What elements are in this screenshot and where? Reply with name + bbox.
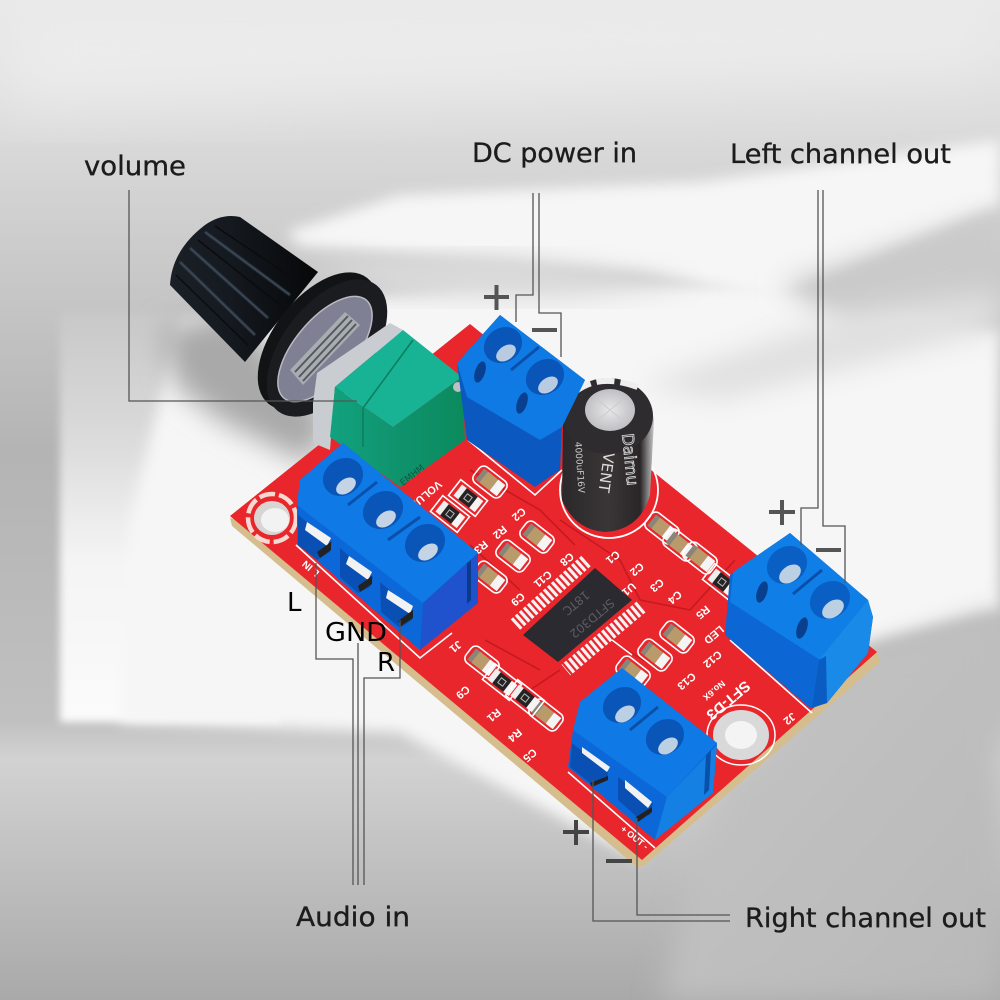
amplifier chip: 18TC <box>560 588 592 618</box>
minus sign: right channel <box>606 859 632 863</box>
label: DC power in: DC power in <box>472 138 637 169</box>
threaded shaft <box>290 312 360 385</box>
board labels: L IN <box>301 558 322 578</box>
leader: volume <box>129 190 357 401</box>
board labels: C2 <box>509 505 528 523</box>
minus sign: left channel <box>816 548 841 552</box>
label: GND: GND <box>325 618 387 648</box>
plus sign: right channel <box>563 820 589 845</box>
silkscreen outlines <box>296 440 812 848</box>
leader: DC power plus <box>516 193 533 322</box>
potentiometer: EMHM <box>399 463 427 488</box>
washer <box>261 281 389 417</box>
board labels: LED <box>701 623 726 646</box>
left mounting hole <box>248 494 296 542</box>
copper traces <box>470 470 735 690</box>
minus sign: DC <box>532 328 557 332</box>
board labels: C9 <box>508 590 527 608</box>
smd capacitors <box>462 464 720 733</box>
leader: right channel plus <box>593 780 730 921</box>
label: Left channel out: Left channel out <box>730 139 951 170</box>
board labels <box>301 478 798 851</box>
terminal: left channel out <box>725 533 873 708</box>
leader: DC power minus <box>539 193 561 357</box>
circuit board <box>230 324 880 868</box>
leader: right channel minus <box>637 818 730 915</box>
knob skirt <box>234 251 402 431</box>
leader: audio R <box>364 620 400 885</box>
board labels: R2 <box>490 523 509 541</box>
leader: audio L <box>316 563 353 885</box>
volume knob <box>170 216 411 438</box>
board labels: J1 <box>447 638 464 655</box>
board labels: C5 <box>520 746 539 764</box>
board labels: R1 <box>484 706 503 724</box>
leader lines <box>129 190 845 921</box>
board labels: U1 <box>619 580 638 598</box>
capacitor <box>560 378 658 538</box>
board surface <box>230 324 877 860</box>
plus sign: DC <box>484 285 509 310</box>
board labels: C13 <box>675 670 698 692</box>
board edge <box>230 518 880 868</box>
board labels: C11 <box>531 568 554 589</box>
terminal: audio in <box>297 443 478 650</box>
label: Right channel out: Right channel out <box>745 903 986 934</box>
knob barrel <box>170 216 318 362</box>
green body side <box>330 377 465 487</box>
terminal: right channel out <box>568 668 717 840</box>
label: L: L <box>287 588 302 618</box>
label: R: R <box>377 648 395 678</box>
leader: audio GND <box>357 643 359 885</box>
capacitor: Daimu <box>618 432 642 486</box>
smd resistors <box>430 480 742 716</box>
potentiometer <box>313 323 465 488</box>
terminal: DC power <box>457 315 585 487</box>
capacitor: 4000uF16V <box>572 442 586 494</box>
board labels: SFT-D3 <box>703 677 753 723</box>
board labels: R5 <box>693 603 712 621</box>
board labels: C3 <box>647 576 666 594</box>
board labels: C1 <box>603 548 622 566</box>
metal bracket <box>313 323 403 450</box>
board labels: C9 <box>453 683 472 701</box>
board labels: R4 <box>505 726 524 745</box>
capacitor: VENT <box>594 451 618 495</box>
board labels: J2 <box>781 710 798 727</box>
board labels: VOLUME <box>400 478 444 517</box>
board labels: R3 <box>471 538 490 556</box>
label: Audio in: Audio in <box>296 902 410 933</box>
green body top <box>335 330 462 427</box>
plus sign: left channel <box>769 500 795 525</box>
right mounting hole <box>707 705 775 765</box>
leader: left channel plus <box>801 190 818 545</box>
board labels: C12 <box>701 648 724 670</box>
board labels: C8 <box>557 550 576 568</box>
amplifier chip: SFTD302 <box>567 596 617 641</box>
label: volume: volume <box>84 151 186 182</box>
amplifier chip <box>515 561 641 670</box>
board labels: No.6X <box>701 678 727 703</box>
board labels: C4 <box>665 588 684 607</box>
board labels: C2 <box>627 560 646 578</box>
board labels: + OUT - <box>619 824 650 851</box>
leader: left channel minus <box>823 190 845 583</box>
